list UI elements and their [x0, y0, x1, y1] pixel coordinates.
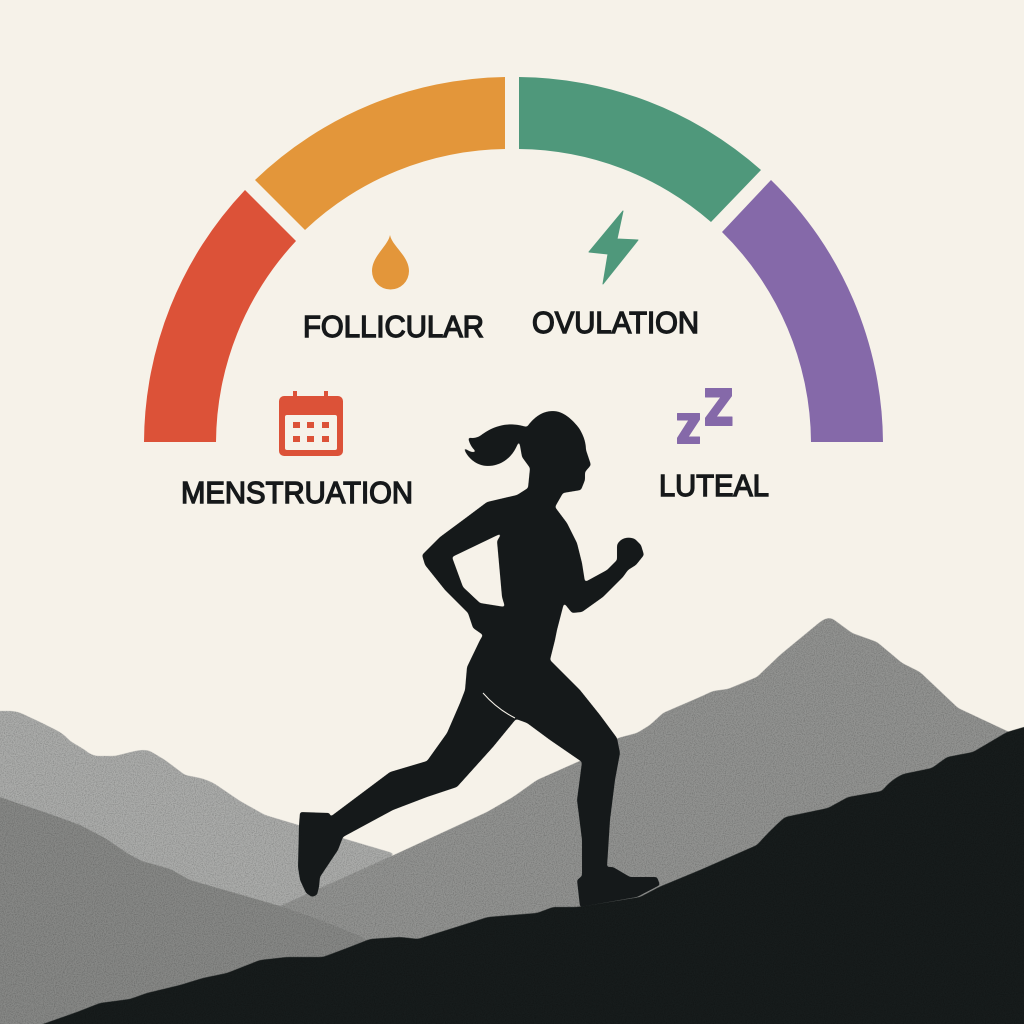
right mountain with peak	[200, 618, 1024, 1000]
shorts highlight line	[483, 693, 515, 718]
icon: calendar	[279, 391, 343, 456]
arc segment: follicular (orange)	[255, 77, 505, 230]
foreground black ridge	[0, 722, 1024, 1024]
icon: sleep zz	[678, 388, 732, 444]
label: follicular: FOLLICULAR	[303, 309, 484, 344]
cycle gauge arc	[144, 77, 883, 442]
body	[298, 411, 660, 907]
arc segment: luteal (purple)	[722, 180, 883, 442]
arc segment: menstruation (red)	[144, 190, 296, 442]
icon: water drop	[372, 235, 409, 290]
runner silhouette	[298, 411, 660, 907]
mountain landscape	[0, 618, 1024, 1024]
arc segment: ovulation (green)	[519, 77, 761, 222]
label: luteal: LUTEAL	[659, 468, 769, 503]
label: ovulation: OVULATION	[532, 305, 699, 340]
mid left mountain	[0, 790, 400, 1024]
icon: lightning bolt	[589, 211, 638, 284]
back left mountain	[0, 711, 396, 920]
label: menstruation: MENSTRUATION	[181, 475, 413, 510]
